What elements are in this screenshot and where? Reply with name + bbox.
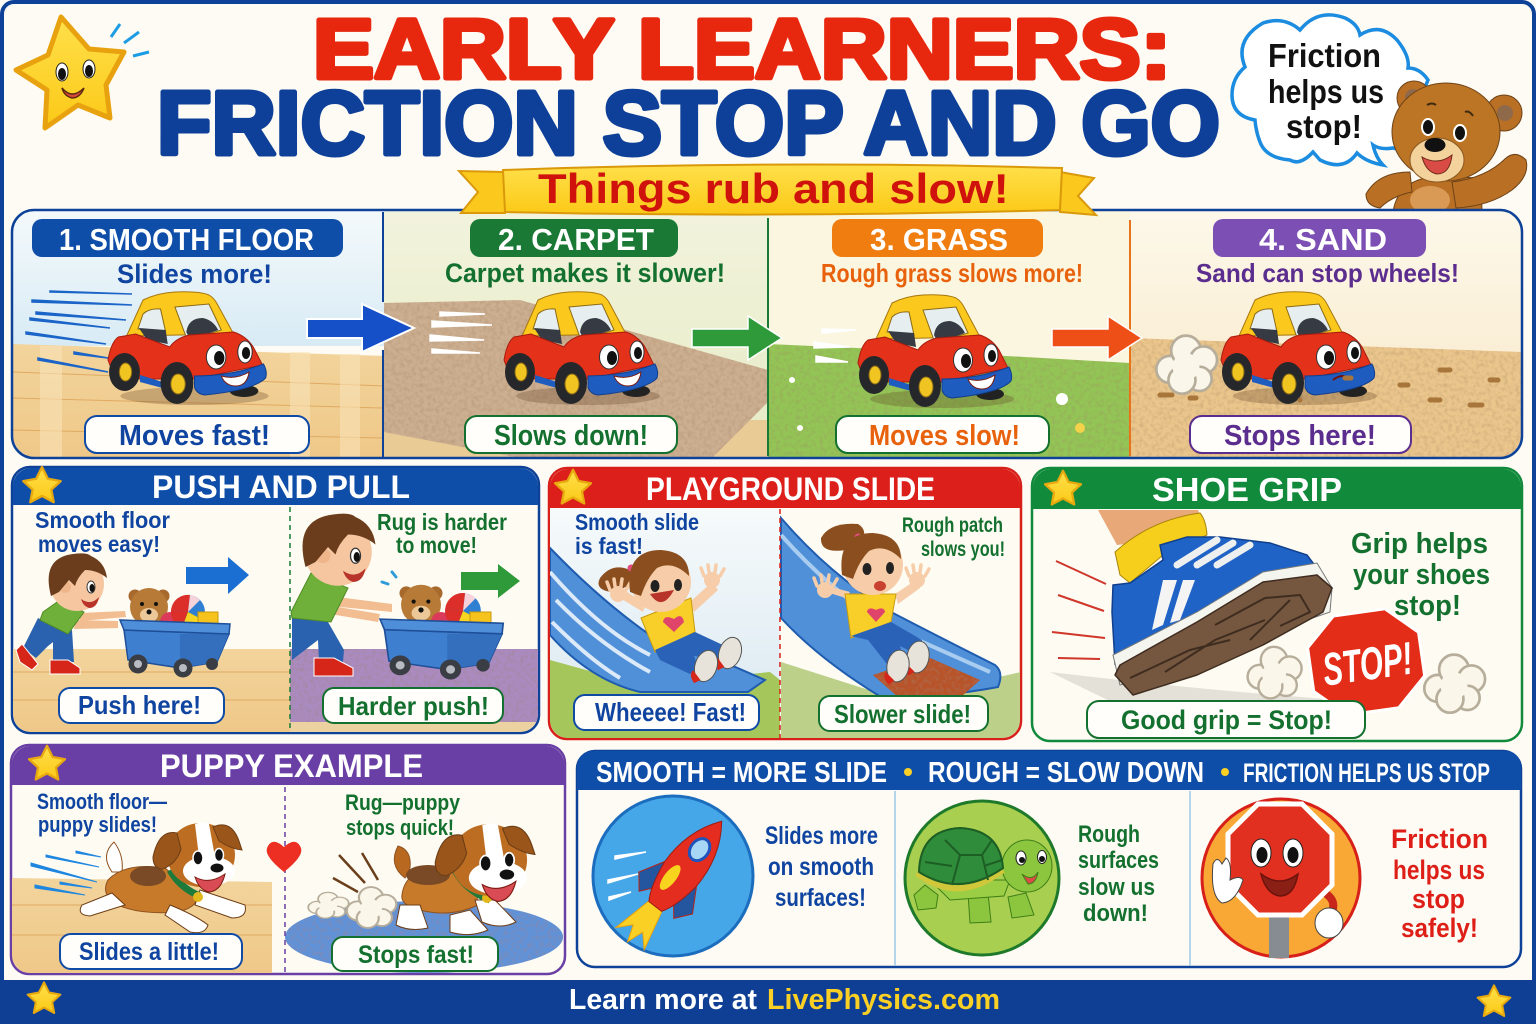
panel: surfaces <box>12 210 1522 458</box>
caption: stop! <box>1394 590 1461 622</box>
left caption <box>37 789 167 837</box>
labels <box>59 688 224 723</box>
scenes <box>11 745 565 974</box>
caption: stop <box>1391 824 1488 943</box>
header text: ROUGH = SLOW DOWN <box>928 757 1204 789</box>
caption: stop: stop <box>1412 884 1465 914</box>
left caption <box>575 509 699 559</box>
step 2: Carpet makes it slower! <box>445 258 725 288</box>
label: Stops fast! <box>358 941 474 969</box>
label: Good grip = Stop! <box>1121 705 1332 735</box>
step 1: Slides more! <box>117 259 272 289</box>
caption: rough: Rough <box>1078 821 1140 848</box>
step 3 <box>789 219 1085 453</box>
footer: LivePhysics.com <box>767 984 1000 1016</box>
girl slow <box>814 524 932 688</box>
arrow: orange <box>1052 316 1142 360</box>
footer: Learn more at <box>569 984 757 1016</box>
icon: star <box>555 470 591 504</box>
heading: PLAYGROUND SLIDE <box>646 471 935 507</box>
label: Slower slide! <box>834 699 971 729</box>
right caption: Rough patch <box>902 514 1003 537</box>
step 3: Rough grass slows more! <box>821 258 1083 288</box>
speech bubble <box>1232 15 1428 165</box>
step 4: Stops here! <box>1224 420 1376 452</box>
right caption: slows you! <box>921 538 1005 561</box>
caption: smooth: Slides more <box>765 822 878 850</box>
title <box>157 2 1220 174</box>
girl fast <box>598 550 745 688</box>
labels: Slides a little! <box>79 938 219 966</box>
caption: smooth: on smooth <box>768 853 874 881</box>
icon: heart <box>267 842 301 872</box>
icon: puppy sliding <box>80 822 245 933</box>
motion lines <box>31 851 101 895</box>
speech bubble: Friction <box>1268 37 1381 74</box>
left caption: is fast! <box>575 533 643 559</box>
header <box>1032 468 1522 712</box>
caption: stop: Friction <box>1391 824 1488 854</box>
wagon on floor <box>120 588 230 678</box>
motion lines <box>1052 561 1106 659</box>
step 3: Moves slow! <box>869 420 1020 452</box>
header text <box>596 757 1490 789</box>
header bar <box>577 751 1521 790</box>
heading: PUSH AND PULL <box>152 469 410 505</box>
icon: smiling star <box>16 17 149 128</box>
left caption: puppy slides! <box>38 812 157 837</box>
step 3: 3. GRASS <box>870 222 1008 257</box>
left caption: moves easy! <box>38 531 160 557</box>
arrow <box>461 564 520 598</box>
icon: puppy stopping <box>394 824 535 935</box>
icon: teddy bear <box>1366 81 1527 214</box>
boy pushing on rug <box>291 514 392 676</box>
heading: SHOE GRIP <box>1152 471 1342 508</box>
right caption <box>345 790 461 840</box>
left caption: Smooth slide <box>575 509 699 535</box>
step 4: 4. SAND <box>1259 222 1387 257</box>
panel: push and pull <box>12 467 539 733</box>
caption: rough: down! <box>1083 900 1148 927</box>
caption <box>1351 528 1490 622</box>
icon: turtle <box>905 801 1059 955</box>
step 2: Slows down! <box>494 420 648 452</box>
title: EARLY LEARNERS: <box>313 2 1171 96</box>
caption: rough: slow us <box>1078 874 1155 901</box>
panel: summary <box>577 751 1521 967</box>
caption: stop: helps us <box>1393 855 1485 885</box>
caption: Grip helps <box>1351 528 1488 560</box>
right caption: to move! <box>396 532 477 558</box>
scene: carpet <box>384 211 768 458</box>
ribbon banner: Things rub and slow! <box>538 165 1009 212</box>
header text: SMOOTH = MORE SLIDE <box>596 757 887 789</box>
right caption <box>377 509 507 558</box>
labels: Push here! <box>78 690 201 720</box>
label: Harder push! <box>338 691 489 721</box>
left caption: Smooth floor— <box>37 789 167 814</box>
icon: shoe <box>1098 510 1332 695</box>
step 1 <box>26 219 343 453</box>
right caption: Rug—puppy <box>345 790 461 815</box>
arrow: blue <box>307 304 414 352</box>
scene: smooth floor <box>13 211 384 458</box>
icon: stop sign character <box>1202 799 1360 958</box>
arrow: green <box>692 316 782 360</box>
scene: sand <box>1130 211 1522 458</box>
step 1: Moves fast! <box>119 420 270 452</box>
caption: rough <box>1078 821 1159 927</box>
scene: grass <box>768 211 1130 458</box>
footer <box>0 980 1536 1024</box>
step 4: Sand can stop wheels! <box>1196 258 1459 288</box>
left caption: Smooth floor <box>35 507 170 533</box>
dust puffs <box>1248 647 1485 713</box>
ribbon banner <box>459 164 1096 215</box>
speech bubble: stop! <box>1286 108 1362 145</box>
labels: Wheeee! Fast! <box>595 697 746 727</box>
icon: star <box>29 746 65 780</box>
step 2: 2. CARPET <box>498 222 654 257</box>
label <box>332 937 498 971</box>
icon: rocket <box>593 796 753 963</box>
caption: your shoes <box>1353 559 1490 591</box>
speech bubble: helps us <box>1268 73 1384 110</box>
icon: star <box>23 467 61 502</box>
icon: stop sign <box>1304 605 1429 719</box>
boy pushing on floor <box>16 553 126 674</box>
caption: smooth <box>765 822 878 912</box>
panel: puppy example <box>11 745 565 974</box>
step 4 <box>1156 219 1498 453</box>
caption: smooth: surfaces! <box>775 884 866 912</box>
left caption <box>35 507 170 557</box>
caption: stop: safely! <box>1401 913 1478 943</box>
right caption: Rug is harder <box>377 509 507 535</box>
step 1: 1. SMOOTH FLOOR <box>59 222 314 257</box>
title: FRICTION STOP AND GO <box>157 74 1220 174</box>
wagon on rug <box>380 572 503 679</box>
step 2 <box>430 219 725 453</box>
panel: playground slide <box>549 468 1021 739</box>
icon: stop sign: STOP! <box>1319 632 1416 696</box>
right caption: stops quick! <box>346 815 454 840</box>
right caption <box>902 514 1005 561</box>
dust puffs <box>308 853 396 928</box>
header <box>12 467 539 733</box>
panel outline <box>12 210 1522 458</box>
label <box>1087 701 1365 738</box>
heading: PUPPY EXAMPLE <box>160 748 423 784</box>
arrow <box>186 557 249 594</box>
panel: shoe grip <box>1032 468 1522 741</box>
icon: star <box>1045 471 1081 504</box>
slide scenes <box>549 468 1021 739</box>
caption: rough: surfaces <box>1078 847 1159 874</box>
